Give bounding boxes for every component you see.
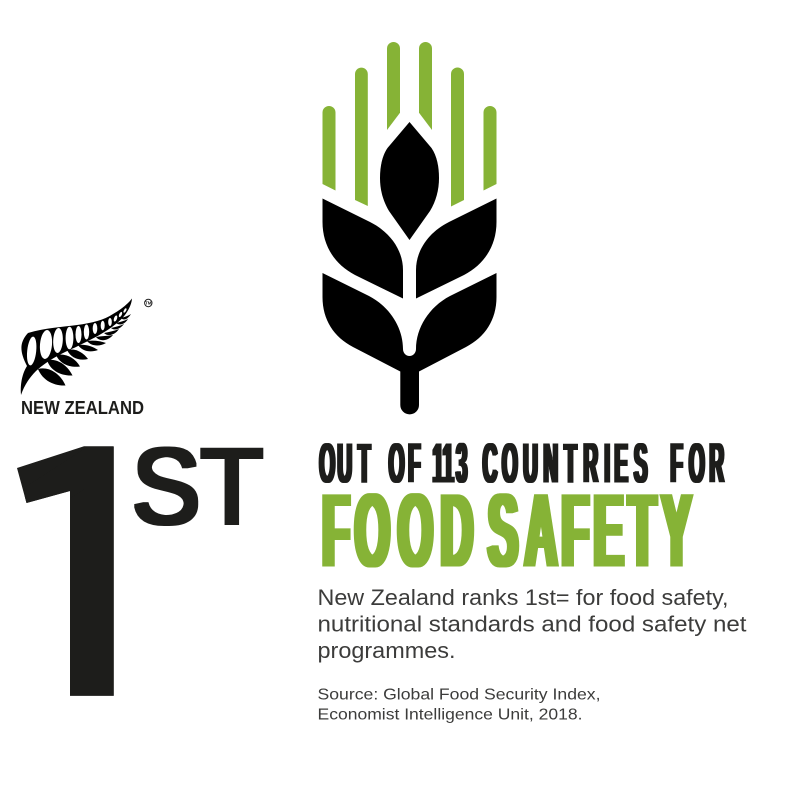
wordmark: NEW ZEALAND (21, 397, 144, 418)
body text: New Zealand ranks 1st= for food safety, (318, 585, 728, 610)
trademark symbol: TM (145, 301, 152, 306)
numeral 1: 1 (0, 368, 201, 773)
body text (318, 585, 747, 663)
ordinal suffix ST: ST (132, 427, 263, 547)
source note (318, 686, 600, 724)
wheat grains: green bars (322, 42, 496, 207)
body text: programmes. (318, 638, 456, 663)
body text: nutritional standards and food safety net (318, 612, 747, 636)
icon: wheat ear (322, 42, 496, 414)
numeral 1 (17, 446, 114, 696)
source note: Source: Global Food Security Index, (318, 686, 600, 704)
wheat leaves: black kernels and stem (322, 122, 496, 414)
headline: food safety: FOOD SAFETY (322, 473, 692, 590)
infographic canvas (17, 42, 746, 723)
big rank number (17, 446, 264, 696)
fern frond (21, 298, 132, 395)
headline: out of 113 countries for: OUT OF 113 COUNTRIES FOR (319, 432, 724, 496)
logo: New Zealand fern mark (21, 298, 152, 418)
source note: Economist Intelligence Unit, 2018. (318, 706, 582, 724)
